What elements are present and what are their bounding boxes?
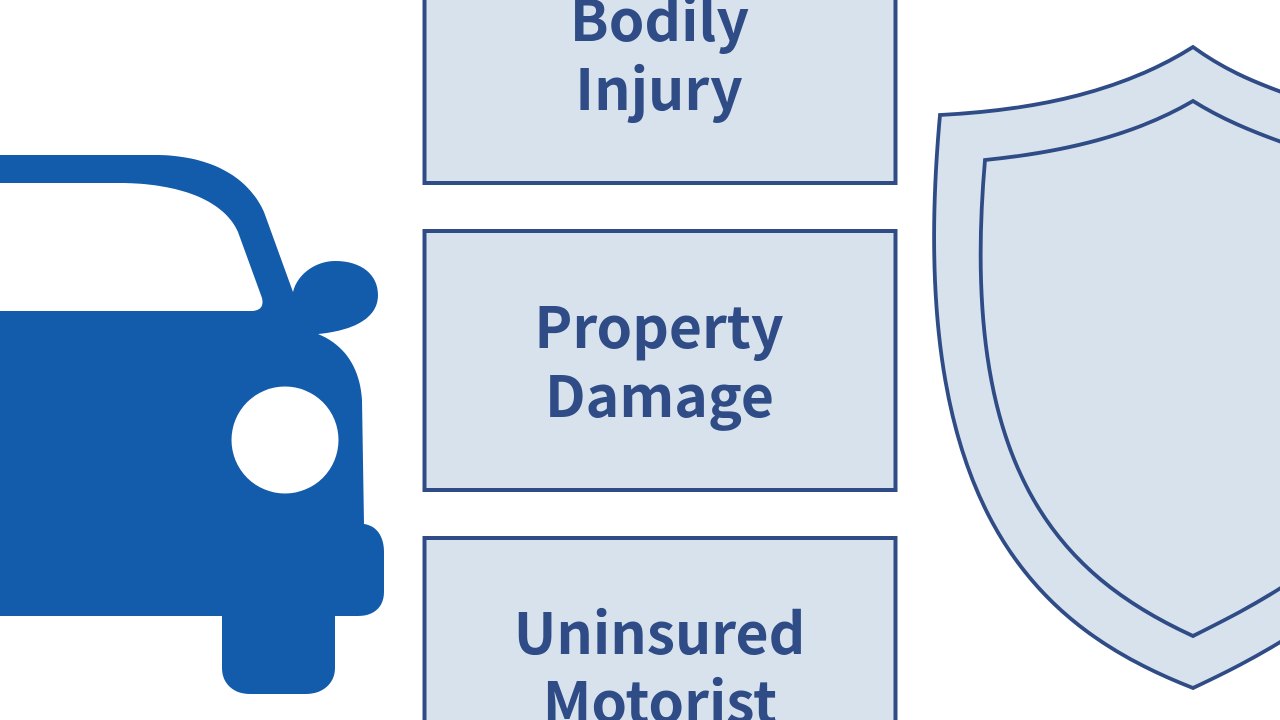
icon: shield <box>934 47 1280 688</box>
panel: property damage: Damage <box>545 352 774 434</box>
panel: property damage <box>424 231 896 490</box>
panel: property damage: Property <box>534 283 784 365</box>
panel: uninsured motorist <box>424 538 896 720</box>
icon: car <box>0 155 384 694</box>
panel: uninsured motorist: Uninsured <box>514 589 805 671</box>
panel: bodily injury: Injury <box>575 45 743 127</box>
panel: bodily injury <box>424 0 896 183</box>
